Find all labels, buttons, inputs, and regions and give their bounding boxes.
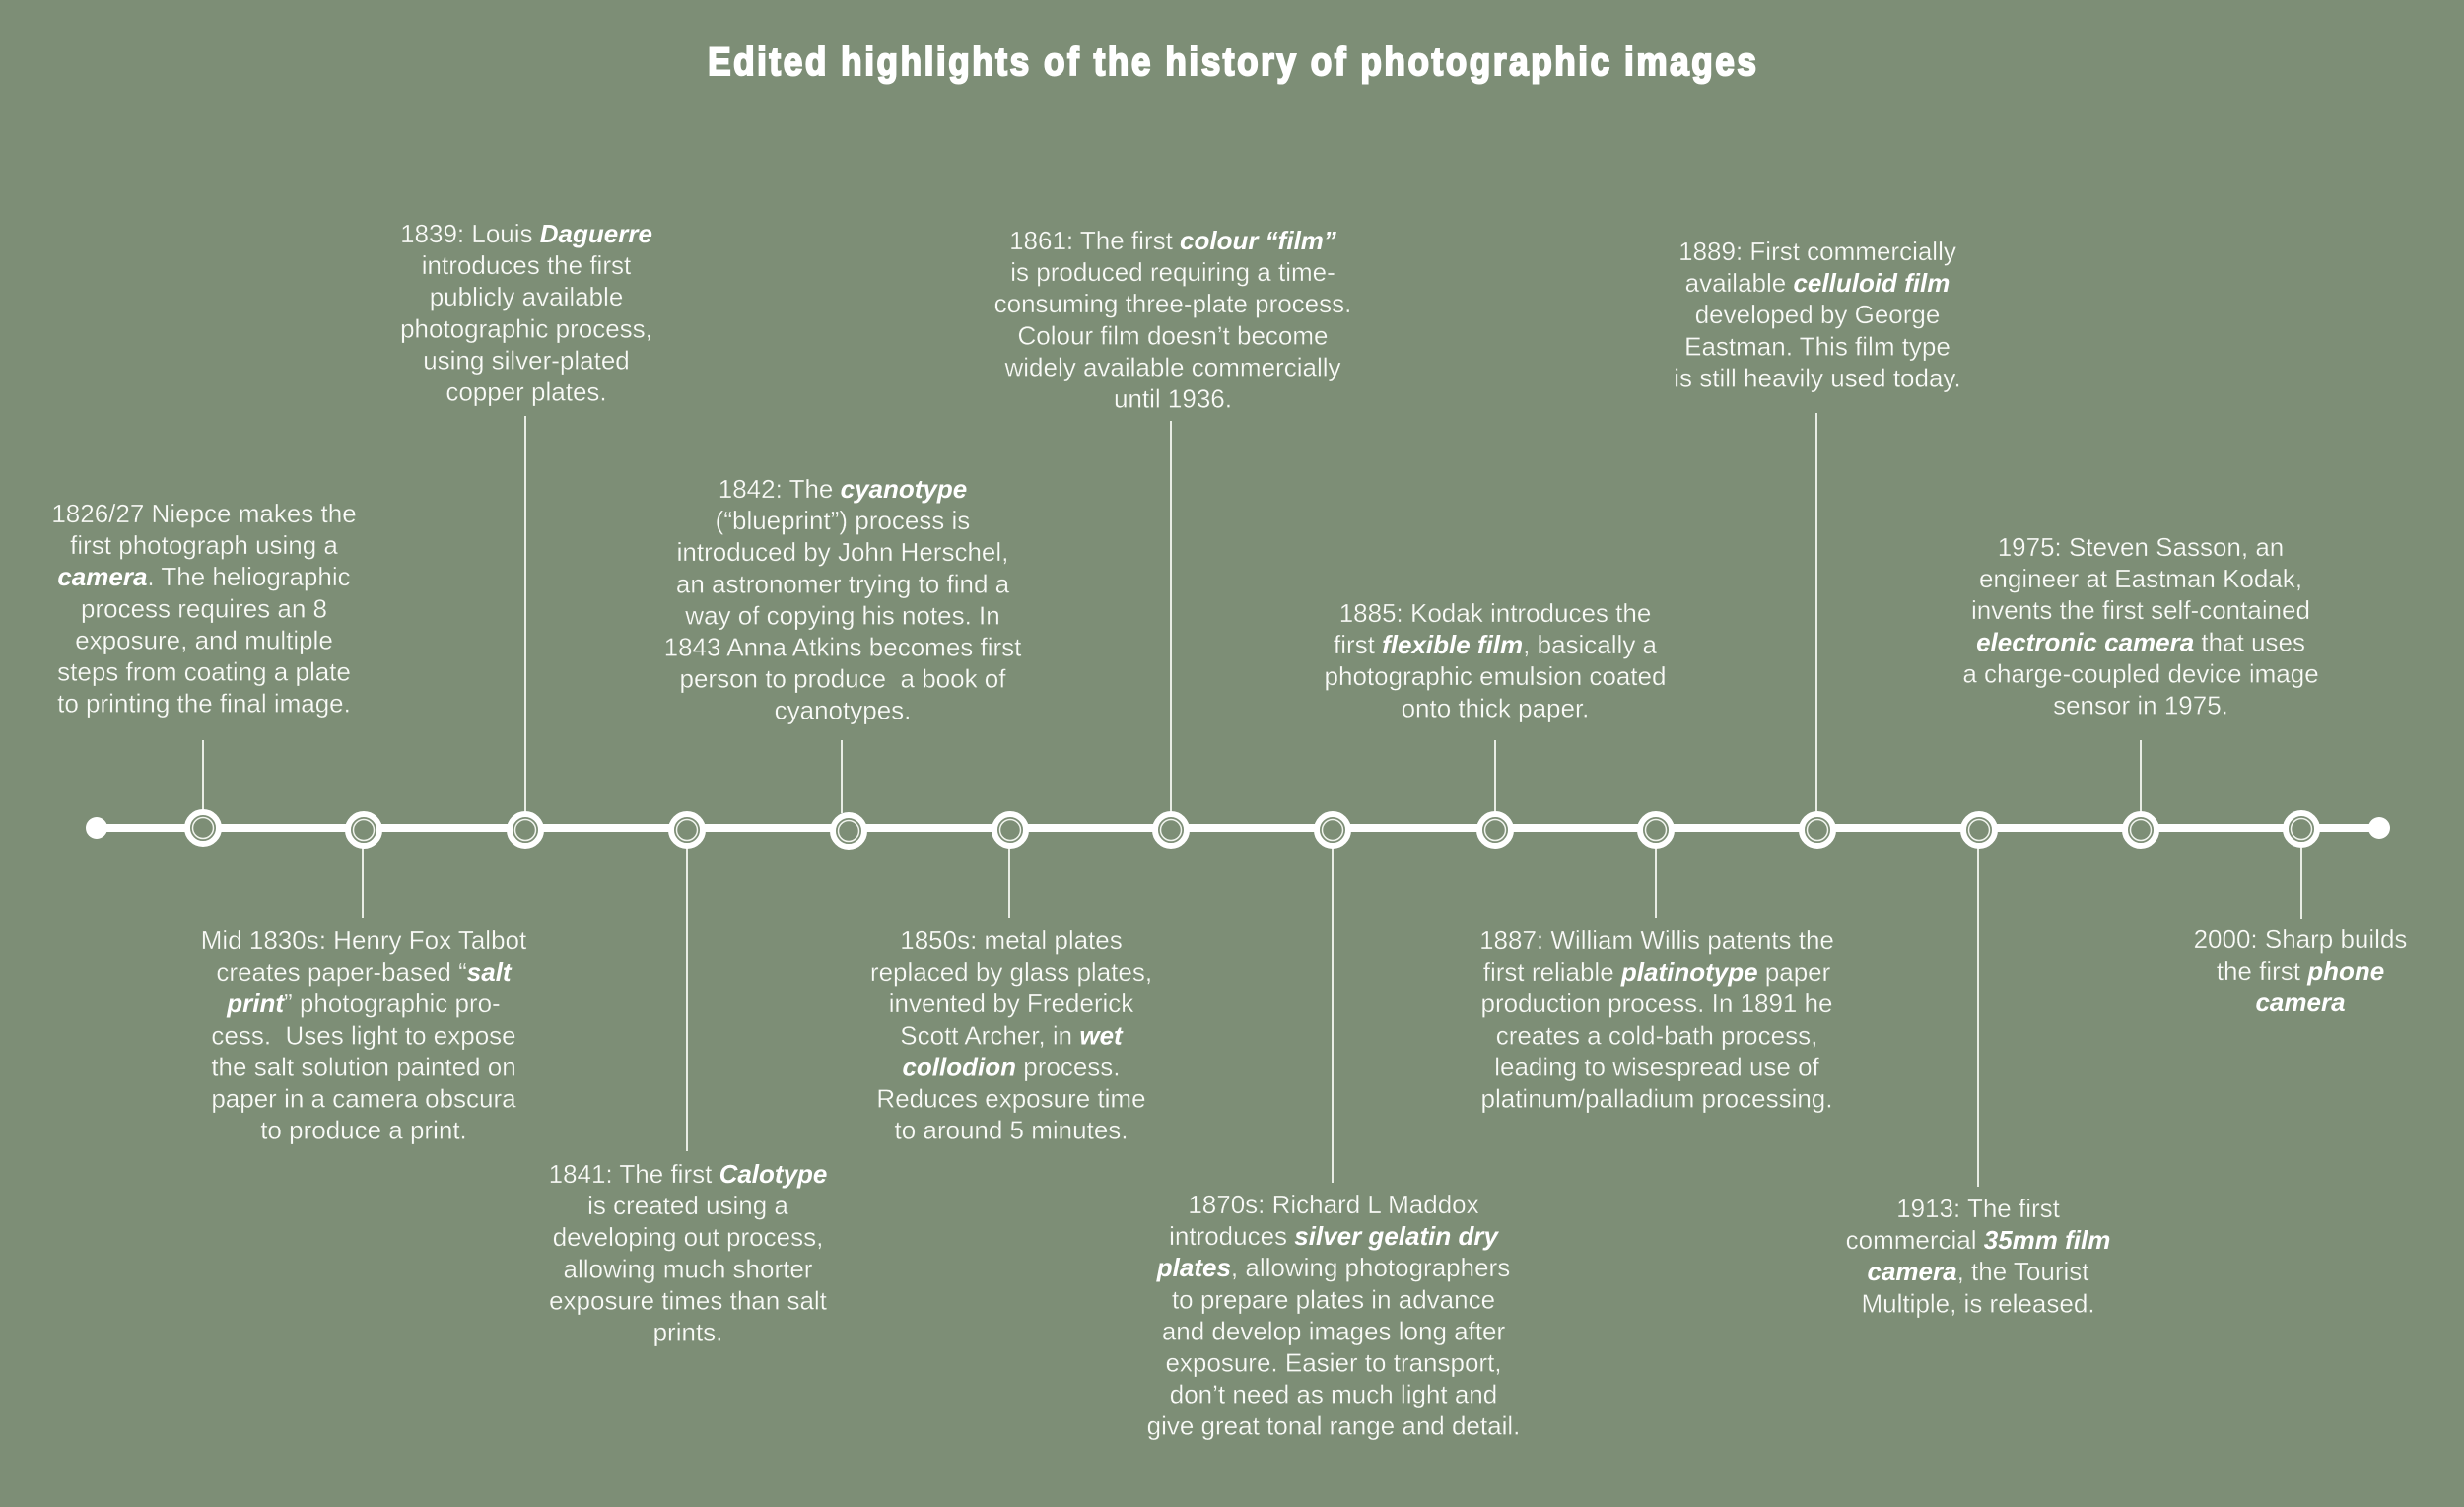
text block: an astronomer trying to find a — [676, 569, 1010, 598]
text block: invents the first self-contained — [1971, 595, 2310, 625]
marker — [2286, 813, 2317, 845]
text block: photographic emulsion coated — [1325, 661, 1666, 691]
text block: allowing much shorter — [564, 1254, 813, 1283]
text block: consuming three-plate process. — [994, 289, 1351, 318]
text block: the first phone — [2217, 956, 2384, 986]
text block: (“blueprint”) process is — [716, 506, 970, 535]
marker — [1802, 814, 1833, 846]
event: 1826/27 camera — [51, 499, 357, 844]
text block: don’t need as much light and — [1170, 1380, 1497, 1409]
connector — [202, 740, 204, 810]
text block: onto thick paper. — [1402, 693, 1589, 722]
connector — [1008, 848, 1010, 918]
connector — [1815, 413, 1817, 812]
connector — [1170, 421, 1172, 812]
marker — [833, 815, 864, 847]
text block: 1913: The first — [1896, 1194, 2061, 1223]
event: 1887 platinotype — [1479, 814, 1834, 1114]
marker — [348, 814, 379, 846]
title: Edited highlights of the history of photographic images — [708, 39, 1756, 83]
text block: a charge-coupled device image — [1962, 658, 2319, 688]
text block: person to produce a book of — [679, 664, 1006, 694]
marker — [1963, 814, 1995, 846]
text block: using silver-plated — [423, 345, 630, 375]
marker — [1155, 814, 1187, 846]
text block: 1826/27 Niepce makes the — [51, 499, 357, 528]
text block: 1975: Steven Sasson, an — [1998, 532, 2284, 562]
text block: is still heavily used today. — [1674, 363, 1961, 392]
text block: cyanotypes. — [775, 696, 911, 725]
text block: is produced requiring a time- — [1010, 257, 1335, 287]
text block: way of copying his notes. In — [684, 600, 1000, 630]
text block: print” photographic pro- — [227, 989, 501, 1018]
text block: Colour film doesn’t become — [1017, 320, 1329, 350]
text block: 1841: The first Calotype — [549, 1159, 827, 1189]
text block: engineer at Eastman Kodak, — [1979, 564, 2302, 593]
text block: to around 5 minutes. — [894, 1116, 1129, 1145]
text block: developed by George — [1695, 300, 1940, 329]
text block: first flexible film, basically a — [1334, 630, 1657, 659]
connector — [841, 740, 843, 813]
text block: 1861: The first colour “film” — [1009, 226, 1336, 255]
text block: replaced by glass plates, — [870, 957, 1152, 987]
text block: 2000: Sharp builds — [2194, 925, 2407, 954]
connector — [1977, 848, 1979, 1187]
text block: 1870s: Richard L Maddox — [1188, 1190, 1479, 1219]
text block: 1842: The cyanotype — [719, 474, 967, 504]
text block: to printing the final image. — [57, 689, 351, 719]
event: 1870s silver gelatin — [1147, 814, 1520, 1441]
text block: camera — [2255, 988, 2346, 1017]
text block: first reliable platinotype paper — [1483, 957, 1830, 987]
text block: give great tonal range and detail. — [1147, 1411, 1520, 1441]
text block: introduced by John Herschel, — [677, 537, 1008, 567]
event: 1975 electronic camera — [1962, 532, 2319, 846]
text block: Mid 1830s: Henry Fox Talbot — [201, 925, 527, 955]
text block: Eastman. This film type — [1684, 331, 1951, 361]
text block: developing out process, — [553, 1222, 823, 1252]
connector — [686, 848, 688, 1151]
text block: and develop images long after — [1162, 1316, 1506, 1345]
marker — [1640, 814, 1672, 846]
event: 1889 celluloid film — [1674, 237, 1961, 846]
text block: Scott Archer, in wet — [900, 1020, 1123, 1050]
text block: exposure times than salt — [549, 1285, 828, 1315]
event: 1850s wet collodion — [870, 814, 1152, 1145]
text block: steps from coating a plate — [57, 656, 351, 686]
text block: platinum/palladium processing. — [1481, 1084, 1832, 1114]
event: 1861 colour film — [994, 226, 1351, 846]
text block: Multiple, is released. — [1861, 1288, 2095, 1318]
text block: is created using a — [587, 1191, 788, 1220]
marker — [2125, 814, 2156, 846]
text block: plates, allowing photographers — [1157, 1253, 1510, 1282]
text block: available celluloid film — [1685, 268, 1950, 298]
connector — [1494, 740, 1496, 812]
text block: photographic process, — [400, 313, 652, 343]
text block: prints. — [653, 1317, 722, 1346]
text block: 1850s: metal plates — [900, 925, 1123, 955]
event: 1913 35mm film camera — [1846, 814, 2110, 1318]
event: 1885 flexible film — [1325, 598, 1666, 846]
text block: collodion process. — [902, 1052, 1121, 1081]
text block: publicly available — [430, 282, 623, 311]
connector — [1332, 848, 1334, 1183]
connector — [1655, 848, 1657, 918]
connector — [362, 848, 364, 918]
text block: introduces the first — [422, 250, 632, 280]
text block: paper in a camera obscura — [211, 1084, 516, 1114]
timeline axis — [86, 817, 2390, 839]
text block: to produce a print. — [260, 1116, 467, 1145]
text block: the salt solution painted on — [211, 1052, 516, 1081]
text block: cess. Uses light to expose — [211, 1020, 516, 1050]
event: 1842 cyanotype — [664, 474, 1022, 847]
text block: production process. In 1891 he — [1480, 989, 1833, 1018]
text block: Reduces exposure time — [876, 1084, 1146, 1114]
text block: process requires an 8 — [81, 593, 327, 623]
text block: 1885: Kodak introduces the — [1339, 598, 1651, 628]
text block: copper plates. — [445, 377, 607, 406]
text block: invented by Frederick — [889, 989, 1134, 1018]
text block: sensor in 1975. — [2053, 690, 2228, 719]
text block: introduces silver gelatin dry — [1169, 1221, 1498, 1251]
text block: 1843 Anna Atkins becomes first — [664, 633, 1022, 662]
marker — [187, 812, 219, 844]
text block: to prepare plates in advance — [1172, 1284, 1495, 1314]
text block: exposure. Easier to transport, — [1165, 1348, 1502, 1378]
text block: camera. The heliographic — [57, 562, 351, 591]
text block: 1889: First commercially — [1678, 237, 1956, 266]
text block: widely available commercially — [1003, 352, 1341, 381]
text block: creates a cold-bath process, — [1496, 1020, 1817, 1050]
connector — [2300, 848, 2302, 919]
marker — [1479, 814, 1511, 846]
text block: camera, the Tourist — [1867, 1257, 2089, 1286]
text block: exposure, and multiple — [75, 625, 333, 654]
connector — [524, 416, 526, 812]
event: mid 1830s salt print — [201, 814, 527, 1145]
marker — [994, 814, 1026, 846]
text block: 1887: William Willis patents the — [1479, 925, 1834, 955]
marker — [510, 814, 541, 846]
text block: first photograph using a — [70, 530, 338, 560]
marker — [1317, 814, 1348, 846]
event: 2000 phone camera — [2194, 813, 2407, 1017]
text block: leading to wisespread use of — [1494, 1052, 1820, 1081]
connector — [2140, 740, 2142, 812]
text block: electronic camera that uses — [1976, 627, 2305, 656]
text block: 1839: Louis Daguerre — [400, 219, 652, 248]
marker — [671, 814, 703, 846]
text block: until 1936. — [1114, 384, 1232, 414]
text block: commercial 35mm film — [1846, 1225, 2110, 1255]
text block: creates paper-based “salt — [216, 957, 512, 987]
event: 1841 Calotype — [549, 814, 828, 1346]
event: 1839 Daguerre — [400, 219, 652, 846]
